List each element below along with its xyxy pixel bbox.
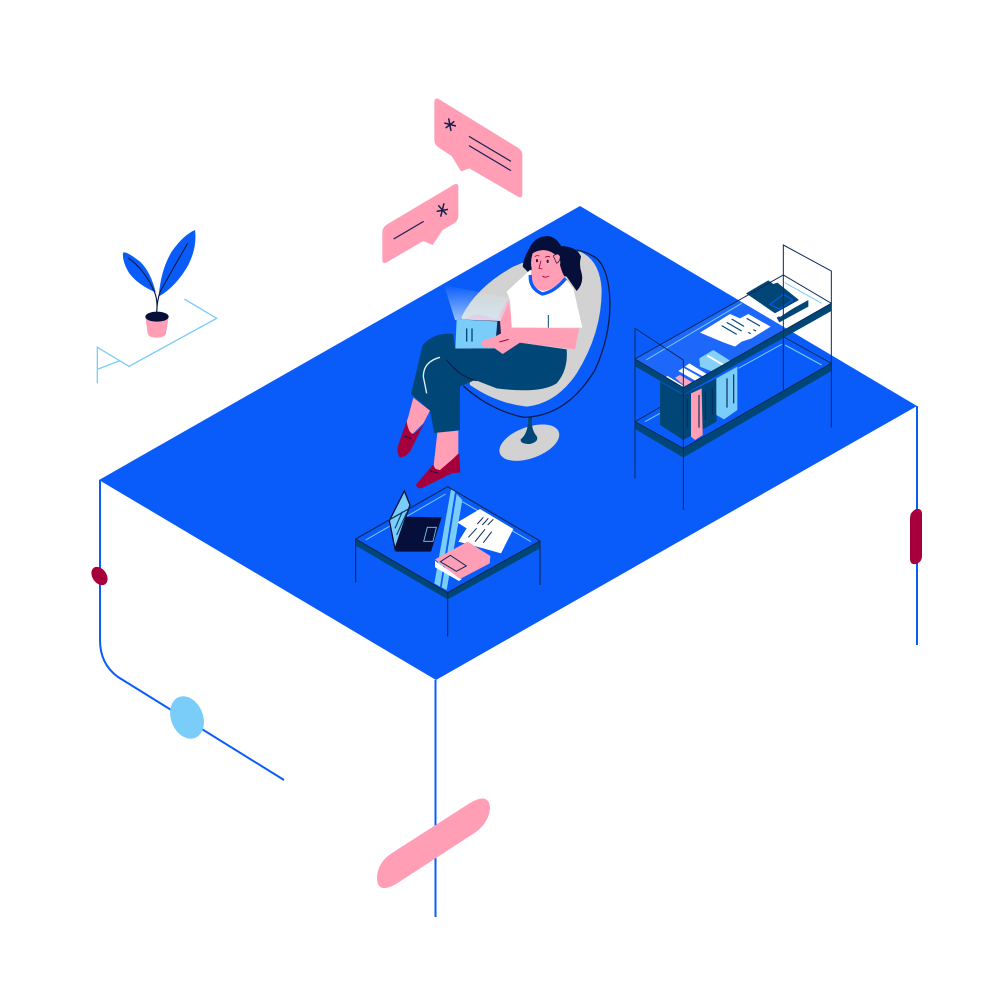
- upper shelf: [635, 275, 831, 394]
- left corner line with markers: [88, 480, 284, 780]
- hair front: [532, 240, 562, 257]
- floor platform: [99, 206, 917, 680]
- front corner line with pink pill: [377, 680, 490, 917]
- papers: [457, 509, 513, 553]
- person in egg chair: [397, 236, 610, 488]
- ledge outline: [97, 299, 217, 383]
- tablet: [455, 319, 501, 350]
- leaves: [123, 230, 195, 313]
- top books: [746, 280, 808, 322]
- table edge: [356, 539, 540, 599]
- face and neck: [530, 250, 565, 291]
- glass reflections: [366, 489, 531, 590]
- ear: [553, 254, 560, 263]
- face details: [535, 256, 550, 277]
- shoes: [397, 421, 460, 488]
- front arm and hand: [481, 328, 579, 354]
- right corner line with marker: [910, 406, 922, 645]
- t-shirt: [507, 270, 582, 328]
- collar: [530, 275, 566, 294]
- laptop: [389, 491, 442, 552]
- documents: [700, 314, 771, 347]
- lower shelf: [635, 337, 831, 458]
- shelf frame lines: [635, 245, 831, 510]
- pink book: [435, 542, 490, 581]
- glass table: [356, 487, 540, 637]
- shelf books: [660, 350, 737, 440]
- bookshelf: [635, 245, 831, 510]
- plant on ledge: [97, 230, 217, 383]
- bubble: lower: [382, 184, 458, 263]
- back arm: [461, 299, 513, 335]
- table frame lines: [356, 487, 540, 637]
- chair seat: [462, 252, 602, 407]
- chair base: [495, 417, 564, 468]
- hair back: [523, 236, 582, 291]
- screen glow: [444, 285, 511, 322]
- bubble: upper: [434, 99, 522, 197]
- legs: [404, 398, 458, 471]
- chair shell: [463, 250, 610, 417]
- speech bubbles: [382, 99, 522, 263]
- pot: [145, 312, 169, 338]
- trousers: [411, 334, 567, 433]
